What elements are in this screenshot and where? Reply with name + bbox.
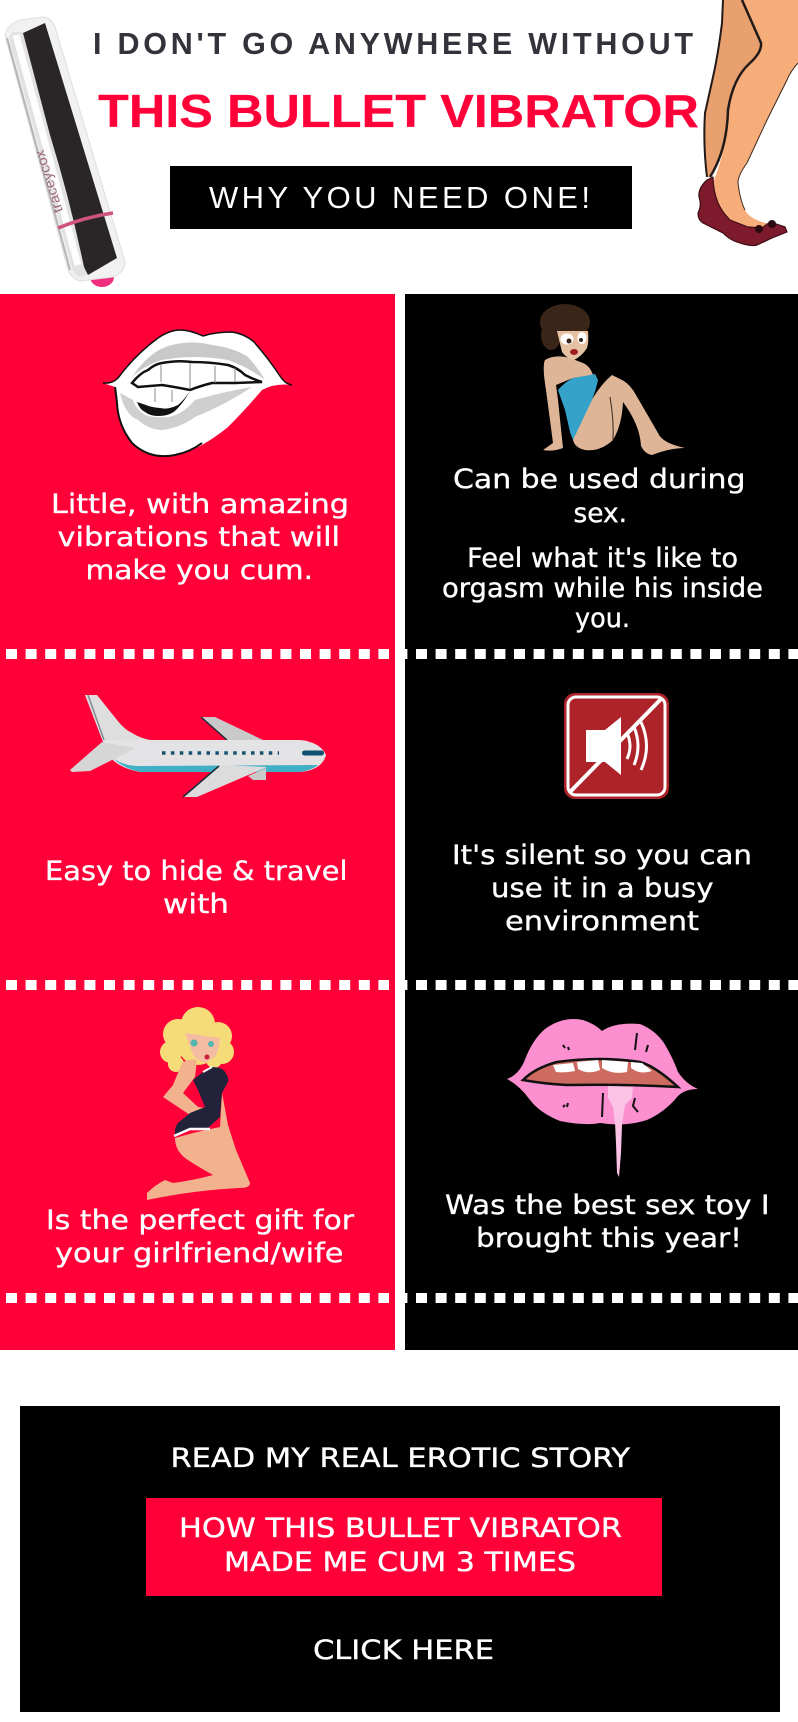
icon: bullet product: traceycox — [31, 148, 66, 215]
text: can be used during sex: Feel what it's like to — [467, 543, 738, 574]
text: perfect gift — [46, 1205, 355, 1269]
text: little with amazing vibrations: make you cum. — [86, 555, 313, 586]
panel: right black column — [405, 294, 798, 1350]
button: story title: MADE ME CUM 3 TIMES — [224, 1547, 576, 1578]
panel: left red column — [0, 294, 395, 1350]
text: little with amazing vibrations: Little, with amazing — [51, 489, 349, 520]
text: can be used during sex — [442, 464, 763, 634]
text: it's silent: It's silent so you can — [452, 840, 752, 871]
dotted divider row 3 — [6, 1293, 798, 1303]
text: can be used during sex: Can be used during — [453, 464, 746, 495]
icon: seated pin-up illustration — [540, 304, 685, 455]
text: it's silent: environment — [505, 906, 699, 937]
icon: legs illustration — [698, 0, 798, 246]
icon: kneeling pin-up illustration — [147, 1007, 250, 1200]
dotted divider row 1 — [6, 649, 798, 659]
button: story title: HOW THIS BULLET VIBRATOR — [179, 1513, 622, 1544]
icon: muted speaker — [564, 693, 669, 799]
text: perfect gift: your girlfriend/wife — [55, 1238, 344, 1269]
text: best sex toy — [445, 1190, 770, 1254]
text: easy to hide and travel — [45, 856, 348, 920]
banner: why you need one — [170, 166, 632, 229]
icon: airplane — [70, 695, 326, 797]
banner: why you need one: WHY YOU NEED ONE! — [209, 180, 590, 215]
text: it's silent — [452, 840, 752, 937]
icon: bullet product — [5, 17, 125, 287]
text: little with amazing vibrations: vibrations that will — [58, 522, 340, 553]
text: little with amazing vibrations — [51, 489, 349, 586]
dotted divider row 2 — [6, 980, 798, 990]
text: read my story: READ MY REAL EROTIC STORY — [170, 1443, 631, 1474]
text: click here: CLICK HERE — [313, 1635, 494, 1666]
text: can be used during sex: sex. — [574, 498, 627, 529]
text: can be used during sex: orgasm while his inside — [442, 573, 763, 604]
button: story title — [146, 1498, 662, 1596]
text: best sex toy: brought this year! — [476, 1223, 742, 1254]
text: easy to hide and travel: Easy to hide & travel — [45, 856, 348, 887]
text: perfect gift: Is the perfect gift for — [46, 1205, 355, 1236]
icon: pink lips — [507, 1019, 698, 1177]
text: best sex toy: Was the best sex toy I — [445, 1190, 770, 1221]
text: easy to hide and travel: with — [163, 889, 229, 920]
text: can be used during sex: you. — [575, 603, 630, 634]
heading: intro line: I DON'T GO ANYWHERE WITHOUT — [93, 27, 693, 61]
heading: main title: THIS BULLET VIBRATOR — [98, 85, 699, 137]
icon: white lips — [103, 330, 292, 456]
panel: call to action — [20, 1406, 780, 1712]
text: it's silent: use it in a busy — [491, 873, 714, 904]
